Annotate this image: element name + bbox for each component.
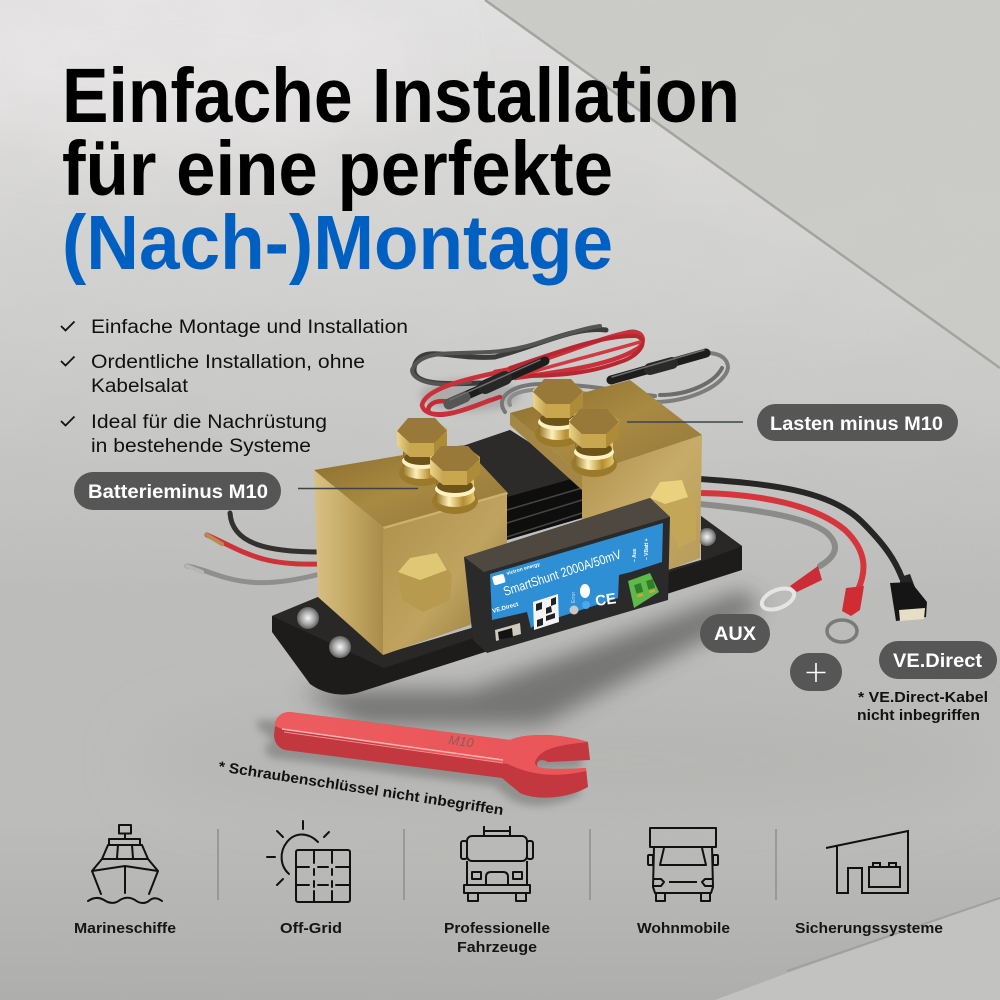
label: plus [790,653,842,691]
title [62,53,740,286]
ring lug: plus [827,586,864,642]
module text: VE.Direct [492,602,519,615]
left brass block [314,445,508,655]
feature checklist [61,317,408,457]
QR code [533,594,559,630]
victron logo [492,574,506,585]
title: (Nach-)Montage [62,200,613,286]
icon: off-grid solar [267,821,350,902]
note: VE.Direct cable not included: nicht inbegriffen [857,708,980,724]
icon: marine vessel [88,825,162,903]
icon: motorhome [648,828,718,901]
label: AUX: AUX [714,624,756,645]
module text: – VBatt + [644,538,650,560]
title: Einfache Installation [62,53,740,139]
left cable stubs [187,513,320,583]
wrench marking: M10 [448,732,475,751]
application labels [74,920,943,956]
application row [74,821,943,956]
icon: backup systems [826,831,908,893]
right cables: black, red, grey [700,479,902,590]
label: AUX [700,614,770,653]
check item 2: Kabelsalat [91,376,189,397]
application labels: Wohnmobile [637,920,730,937]
status LEDs and Bluetooth [570,584,590,614]
note: VE.Direct cable not included [857,690,988,724]
note: wrench not included: * Schraubenschlüssel nicht inbegriffen [217,759,504,819]
title: für eine perfekte [62,126,613,212]
callout: Lasten minus M10 [627,404,958,441]
top bolts [397,379,619,514]
application labels: Off-Grid [280,920,342,937]
right brass block [510,380,702,570]
application labels: Professionelle [444,920,550,937]
product: SmartShunt with cables [187,326,927,725]
VE.Direct connector [890,574,927,621]
application labels: Sicherungssysteme [795,920,943,937]
callout: Batterieminus M10 [74,472,418,510]
SmartShunt module [464,498,670,653]
module text: SmartShunt 2000A/50mV [501,546,623,599]
blue label panel [490,523,663,628]
callout: Batterieminus M10: Batterieminus M10 [88,482,268,503]
check item 1: Einfache Montage und Installation [91,317,408,338]
module text: – Aux [632,548,638,562]
module text: victron energy [506,562,541,577]
fuse holders [449,350,706,404]
dividers [218,829,776,900]
top cable bundle [412,326,728,415]
check item 3 [61,412,327,457]
wrench [256,712,590,805]
check item 2: Ordentliche Installation, ohne [91,352,365,373]
check item 2 [61,352,365,397]
callout: Lasten minus M10: Lasten minus M10 [770,414,943,435]
application labels: Fahrzeuge [457,939,537,956]
ring lug: AUX [759,566,822,614]
application labels: Marineschiffe [74,920,176,937]
check item 3: Ideal für die Nachrüstung [91,412,327,433]
VE.Direct port [495,623,521,641]
green terminal [628,573,659,608]
note: VE.Direct cable not included: * VE.Direct-Kabel [858,690,988,706]
check item 3: in bestehende Systeme [91,436,311,457]
label: VE.Direct: VE.Direct [893,651,983,672]
icon: professional vehicle [461,826,533,901]
black base plate [272,516,742,695]
module text: CE [594,590,617,610]
black busbar fins [463,430,582,540]
label: VE.Direct [879,641,997,679]
module text: Error [571,592,577,603]
side bolt [650,480,696,548]
ground shadow [300,590,760,725]
side bolt [397,553,452,612]
